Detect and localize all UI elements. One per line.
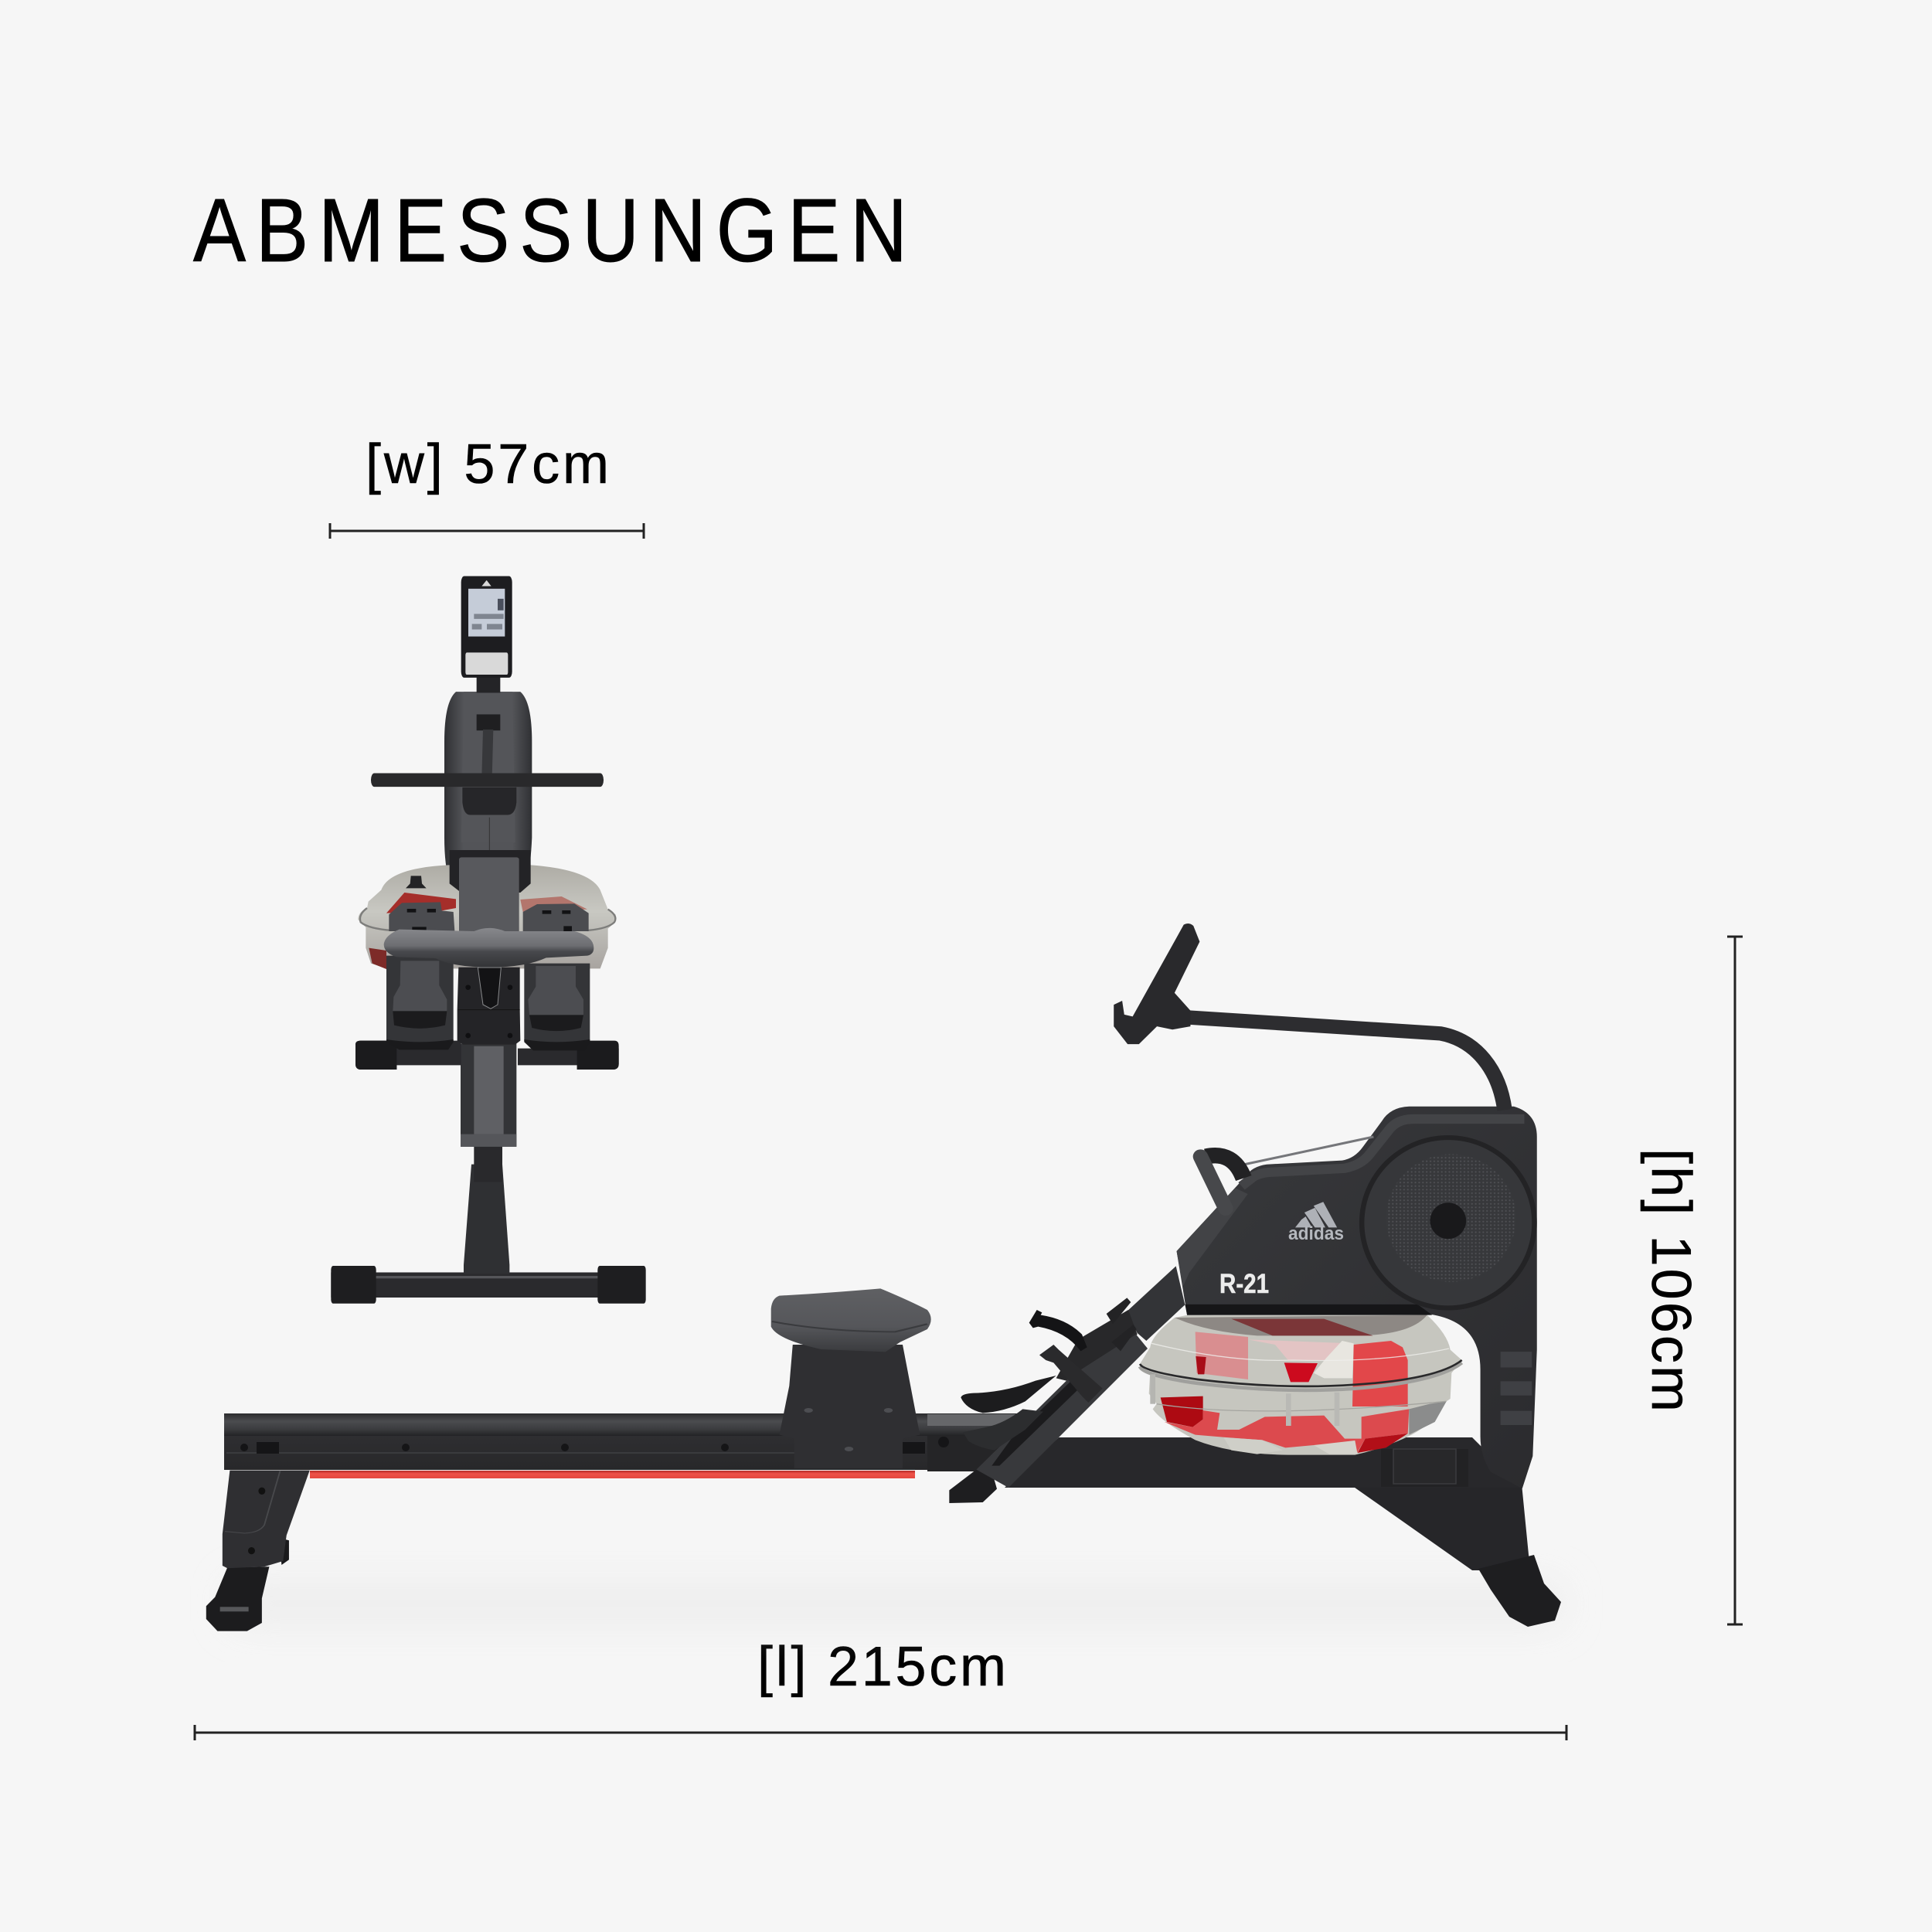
foot plate upper <box>961 1376 1056 1413</box>
column vents <box>1501 1352 1532 1425</box>
front view: lower structure <box>355 850 619 1070</box>
slider channel <box>976 1335 1148 1488</box>
side view: front foot <box>206 1566 269 1631</box>
flywheel speaker <box>1359 1135 1537 1311</box>
front view: rear leg <box>464 1165 509 1274</box>
side view: incline rail and foot stretcher <box>949 1266 1185 1503</box>
front view: centre rail <box>459 857 519 931</box>
title: ABMESSUNGEN <box>193 181 907 281</box>
front view: foot strap right <box>523 903 589 931</box>
width dimension label: [w] 57cm <box>366 434 609 495</box>
front view: resistance housing <box>444 692 532 888</box>
front view: console neck <box>477 675 500 692</box>
foot strap lower <box>1039 1345 1103 1403</box>
adidas wordmark: adidas <box>1288 1223 1344 1244</box>
side view: main rail <box>224 1413 1028 1471</box>
height dimension label: [h] 106cm <box>1640 1148 1702 1412</box>
lower rail end <box>949 1470 997 1503</box>
side view: red light strip <box>310 1471 915 1478</box>
floor shadow <box>232 1584 1561 1623</box>
front view: foot plate right <box>524 964 590 1050</box>
foot plate lower <box>963 1409 1043 1451</box>
front view: console <box>461 577 512 678</box>
front view rower <box>331 577 646 1304</box>
strap buckles <box>1107 1298 1137 1351</box>
side view: rear leg <box>1349 1484 1530 1570</box>
length dimension label: [l] 215cm <box>757 1636 1006 1698</box>
front view: foot plate left <box>386 956 454 1049</box>
housing bottom edge <box>1185 1304 1432 1315</box>
front view: water tank <box>358 865 616 969</box>
side view rower <box>206 923 1561 1631</box>
front view: back feet bar <box>355 1041 619 1070</box>
model name: R-21 <box>1219 1269 1269 1299</box>
front view: foot strap left <box>389 902 454 931</box>
height dimension line <box>1727 937 1743 1624</box>
front view: long rail <box>461 1043 516 1182</box>
front view: seat carriage <box>457 968 520 1045</box>
foot strap upper <box>1029 1310 1087 1351</box>
front view: housing base <box>450 850 531 893</box>
front view: upper structure <box>331 577 646 1304</box>
width dimension line <box>329 523 645 539</box>
side view: housing and display arm <box>1114 923 1537 1488</box>
side view: base beam <box>1005 1437 1522 1488</box>
housing bevel <box>1177 1188 1248 1287</box>
display holder <box>1114 923 1199 1044</box>
side view: rear foot <box>1478 1555 1561 1627</box>
front view: seat <box>384 928 594 968</box>
side view: front leg <box>223 1471 310 1568</box>
display arm <box>1187 1017 1505 1110</box>
front view: handle bar <box>371 774 604 787</box>
rope handle <box>1200 1137 1373 1209</box>
housing top band <box>1242 1119 1524 1186</box>
side view: water tank <box>1140 1315 1462 1455</box>
main housing <box>1177 1107 1537 1488</box>
side view: seat <box>771 1288 931 1352</box>
belt track <box>1056 1310 1138 1386</box>
upper incline rail <box>1126 1266 1185 1341</box>
length dimension line <box>195 1725 1566 1740</box>
side view: seat post <box>780 1345 920 1468</box>
front view: floor stabiliser <box>331 1266 646 1304</box>
side view: electronics cover <box>1381 1449 1468 1487</box>
adidas logo mark <box>1295 1202 1337 1227</box>
